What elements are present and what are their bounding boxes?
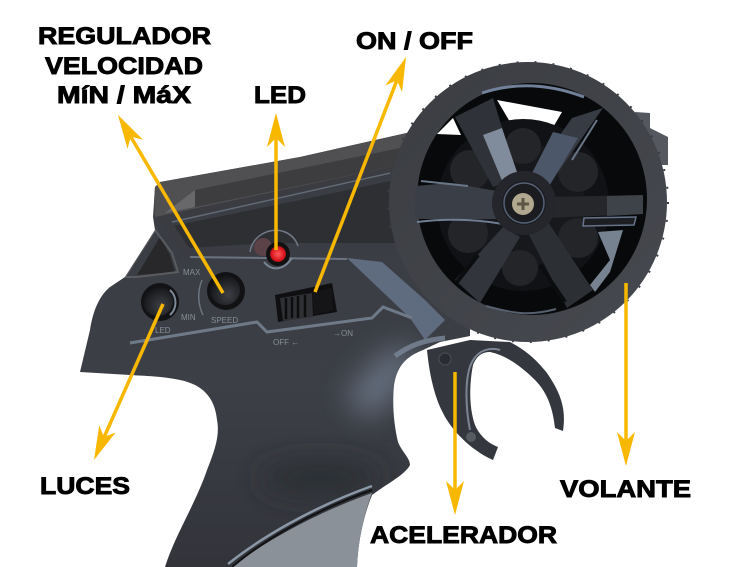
- upper recessed panel: [168, 180, 395, 248]
- button: speed regulator: [207, 272, 245, 310]
- silver reflection lower right: [590, 230, 623, 292]
- arrow: LED: [267, 113, 285, 250]
- lit ridge under wheel: [395, 338, 445, 356]
- spoke: right: [547, 195, 643, 218]
- transmitter body: [70, 120, 490, 567]
- label: speed regulator: REGULADOR: [38, 23, 211, 50]
- spoke: left: [415, 183, 503, 219]
- label: on/off: ON / OFF: [356, 28, 473, 55]
- lit lower shading: [345, 345, 420, 420]
- label: lights: LUCES: [40, 473, 130, 500]
- small panel labels: OFF ←: [273, 338, 299, 347]
- hub and screw: [502, 181, 546, 225]
- label: wheel: VOLANTE: [560, 476, 691, 503]
- rim highlights: [482, 86, 584, 97]
- lit diagonal band: [347, 258, 445, 340]
- grip texture: [232, 493, 372, 567]
- central star: [492, 171, 556, 235]
- small panel labels: →ON: [333, 329, 353, 338]
- small panel labels: SPEED: [211, 316, 238, 325]
- trigger: [427, 340, 564, 460]
- label: speed regulator: VELOCIDAD: [45, 53, 203, 80]
- spoke: upper right: [530, 108, 603, 188]
- wheel: [388, 62, 668, 342]
- small panel labels: MAX: [183, 268, 201, 277]
- button: lights: [141, 283, 179, 321]
- speaker behind: [437, 119, 609, 291]
- dark shading above grip: [260, 462, 380, 494]
- moulded edge lines: [130, 307, 412, 343]
- white gap left: [437, 118, 461, 135]
- label: speed regulator: MíN / MáX: [57, 82, 191, 109]
- small panel labels: [155, 268, 353, 347]
- arrow: speed regulator: [110, 110, 223, 293]
- arrow: on/off: [315, 54, 414, 292]
- wheel knurled edge: [388, 62, 668, 342]
- wheel rim: [389, 62, 667, 342]
- spoke: upper left: [455, 98, 517, 187]
- dark side wedge: [137, 237, 175, 275]
- arrow: throttle: [446, 372, 464, 515]
- spoke: lower left: [455, 227, 520, 303]
- photo: transmitter: [70, 62, 668, 567]
- smoked upper band: [154, 132, 408, 218]
- label: LED: LED: [254, 82, 306, 109]
- label: throttle: ACELERADOR: [370, 522, 557, 549]
- arrow: lights: [86, 304, 163, 464]
- label: speed regulator: [38, 23, 211, 109]
- small panel labels: LED: [155, 326, 171, 335]
- speaker lobes: [448, 128, 598, 286]
- spoke: lower right: [528, 222, 593, 308]
- white gap top: [497, 100, 562, 136]
- arrow: wheel: [617, 283, 635, 466]
- transmitter rear tab behind wheel: [635, 112, 668, 165]
- small panel labels: MIN: [181, 313, 196, 322]
- on/off slide switch: [275, 283, 337, 322]
- LED indicator: [250, 230, 298, 268]
- wheel opening: [417, 83, 647, 315]
